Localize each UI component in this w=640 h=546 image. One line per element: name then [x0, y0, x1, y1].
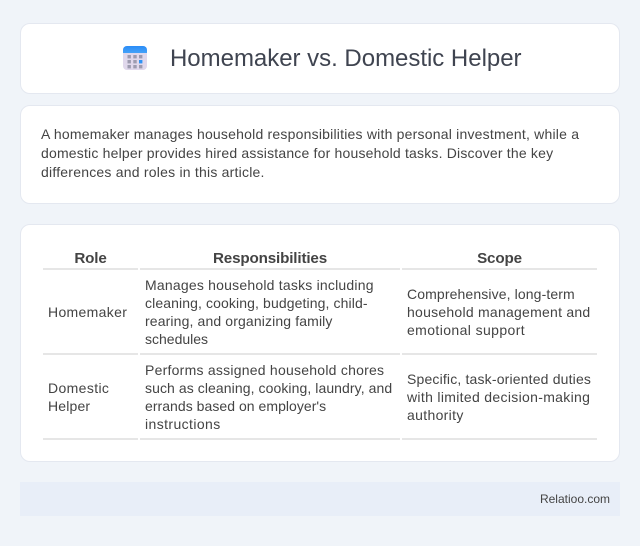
row: Domestic Helper: Domestic — [48, 380, 109, 396]
row: Domestic Helper: Performs assigned household chores — [145, 362, 384, 378]
row: Domestic Helper: errands based on employer's — [145, 398, 326, 414]
row: Domestic Helper: such as cleaning, cooking, laundry, and — [145, 380, 392, 396]
footer bar — [20, 482, 620, 516]
row: Homemaker: cleaning, cooking, budgeting, child- — [145, 295, 368, 311]
intro text: domestic helper provides hired assistance for household tasks. Discover the key — [41, 145, 553, 161]
table header row: Responsibilities — [213, 250, 327, 267]
header panel — [20, 23, 620, 94]
footer credit: Relatioo.com — [540, 492, 610, 506]
table header row: Scope — [477, 250, 522, 267]
row: Homemaker: Homemaker — [48, 304, 127, 320]
table header row — [43, 250, 597, 270]
row: Domestic Helper: instructions — [145, 416, 221, 432]
row: Homemaker: rearing, and organizing family — [145, 313, 333, 329]
intro text: differences and roles in this article. — [41, 164, 265, 180]
intro panel — [20, 105, 620, 204]
intro text: A homemaker manages household responsibilities with personal investment, while a — [41, 126, 579, 142]
row: Homemaker: household management and — [407, 304, 590, 320]
title: Homemaker vs. Domestic Helper — [170, 45, 522, 72]
intro text — [41, 126, 580, 180]
row: Domestic Helper: Specific, task-oriented duties — [407, 371, 591, 387]
row: Domestic Helper — [43, 362, 597, 440]
row: Homemaker: schedules — [145, 331, 208, 347]
row: Homemaker: emotional support — [407, 322, 525, 338]
row: Domestic Helper: authority — [407, 407, 464, 423]
row: Homemaker: Manages household tasks including — [145, 277, 374, 293]
row: Homemaker — [43, 277, 597, 355]
row: Domestic Helper: with limited decision-making — [407, 389, 590, 405]
row: Domestic Helper: Helper — [48, 398, 90, 414]
icon: calendar — [123, 46, 147, 70]
row: Homemaker: Comprehensive, long-term — [407, 286, 575, 302]
table header row: Role — [74, 250, 107, 267]
comparison table panel — [20, 224, 620, 462]
